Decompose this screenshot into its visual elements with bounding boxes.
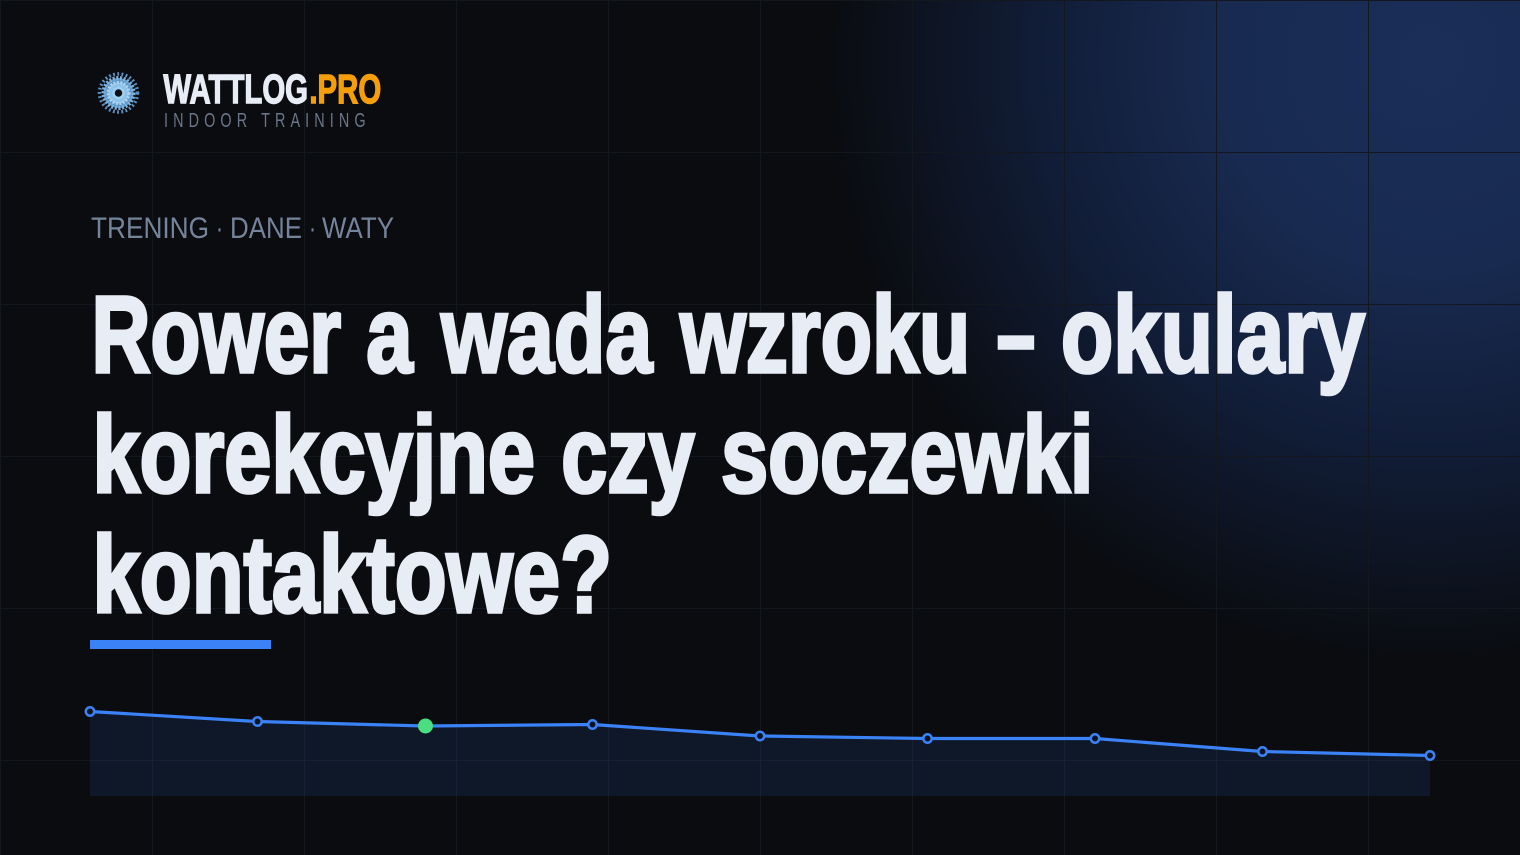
title: Rower xyxy=(92,274,341,396)
title: a xyxy=(366,274,414,396)
wordmark: WATTLOG xyxy=(163,66,308,112)
title: wada xyxy=(441,274,653,396)
highlighted point xyxy=(418,718,433,734)
title underline xyxy=(90,640,271,649)
title: korekcyjne xyxy=(92,394,535,516)
eyebrow tagline: · xyxy=(216,212,223,245)
logo xyxy=(100,66,381,132)
eyebrow tagline: · xyxy=(309,212,316,245)
chart area fill xyxy=(90,712,1430,796)
line chart xyxy=(86,707,1434,796)
chart points xyxy=(86,707,1434,760)
logo subtitle: INDOOR TRAINING xyxy=(164,109,366,132)
title: wzroku xyxy=(680,274,970,396)
title: okulary xyxy=(1061,274,1365,396)
wordmark: .PRO xyxy=(309,66,381,112)
eyebrow tagline: TRENING xyxy=(91,212,209,245)
title: soczewki xyxy=(721,394,1094,516)
icon: cassette cog xyxy=(100,74,138,112)
title: kontaktowe? xyxy=(92,514,612,636)
title: – xyxy=(997,274,1035,396)
title xyxy=(92,274,1365,636)
eyebrow tagline: DANE xyxy=(230,212,302,245)
chart line xyxy=(90,712,1430,756)
eyebrow tagline: WATY xyxy=(322,212,394,245)
title: czy xyxy=(561,394,695,516)
